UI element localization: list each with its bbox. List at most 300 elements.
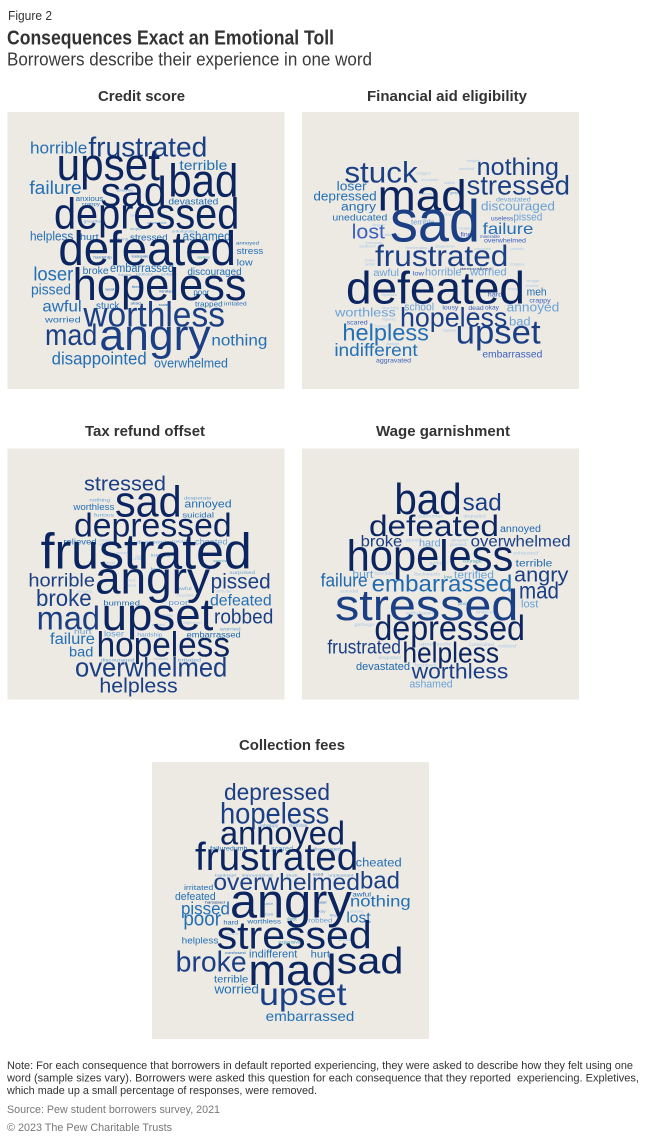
- word cloud: credit score: insufficient: [136, 272, 153, 276]
- word cloud: wage garnishment: subhuman: [418, 513, 444, 518]
- word cloud: credit score: angry: [99, 312, 211, 360]
- word cloud: collection fees: lost: [346, 911, 371, 927]
- word cloud: tax refund offset: panicked: [116, 551, 128, 555]
- panel heading: tax refund offset: Tax refund offset: [85, 424, 205, 440]
- word cloud: wage garnishment: lost: [521, 599, 538, 611]
- word cloud: credit score: poor: [193, 287, 210, 297]
- word cloud: financial aid eligibility: shocked: [526, 284, 538, 288]
- word cloud: wage garnishment: low: [444, 574, 453, 579]
- word cloud: collection fees: scared: [271, 844, 293, 853]
- word cloud: financial aid eligibility: scared: [347, 320, 368, 326]
- word cloud: credit score: inadequate: [132, 253, 149, 258]
- word cloud: tax refund offset: lost: [151, 567, 162, 572]
- word cloud: credit score: loser: [33, 265, 74, 286]
- word cloud: financial aid eligibility: crappy: [529, 299, 551, 305]
- note text: which made up a small percentage of responses, were removed.: [6, 1085, 317, 1097]
- word cloud: tax refund offset: sucked: [151, 553, 171, 558]
- word cloud: tax refund offset: confused: [99, 539, 111, 543]
- word cloud: tax refund offset: sorrow: [213, 559, 229, 563]
- word cloud: collection fees: horrible: [289, 823, 308, 828]
- word cloud: credit score: irritated: [224, 302, 247, 308]
- word cloud: credit score: stress: [237, 246, 264, 256]
- word cloud: financial aid eligibility: dead: [468, 306, 484, 312]
- word cloud: financial aid eligibility: awful: [373, 268, 399, 279]
- word cloud: wage garnishment: terrible: [516, 559, 553, 570]
- word cloud: tax refund offset: unfair: [133, 557, 144, 561]
- word cloud: credit score: ashamed: [183, 230, 231, 244]
- word cloud: financial aid eligibility: uneducated: [332, 213, 387, 223]
- word cloud: wage garnishment: mad: [519, 577, 559, 603]
- word cloud: credit score: pissed: [31, 283, 71, 299]
- word cloud: tax refund offset: robbed: [214, 606, 273, 628]
- word cloud: financial aid eligibility: worried: [469, 267, 507, 279]
- word cloud: financial aid eligibility: bummed: [375, 324, 388, 328]
- word cloud: tax refund offset: furious: [94, 513, 114, 518]
- word cloud: credit score: unfair: [161, 272, 175, 276]
- word cloud: credit score: frustrated: [88, 132, 207, 163]
- word cloud: financial aid eligibility: mad: [378, 173, 467, 221]
- word cloud: financial aid eligibility: sad: [390, 188, 480, 255]
- word cloud: collection fees: bankrupt: [215, 873, 237, 878]
- word cloud: tax refund offset: pained: [126, 584, 136, 588]
- word cloud: tax refund offset: frightened: [183, 621, 202, 625]
- panel background: wage garnishment: [302, 448, 579, 700]
- word cloud: collection fees: bad: [360, 867, 400, 894]
- word cloud: wage garnishment: devastated: [356, 661, 410, 673]
- word cloud: tax refund offset: scared: [135, 554, 145, 558]
- word cloud: tax refund offset: depressed: [74, 508, 232, 545]
- subtitle: Borrowers describe their experience in one word: [7, 50, 372, 70]
- word cloud: collection fees: debt: [287, 917, 298, 922]
- word cloud: tax refund offset: tired: [125, 579, 135, 583]
- word cloud: financial aid eligibility: frightening: [382, 318, 396, 322]
- word cloud: wage garnishment: terrified: [454, 569, 494, 581]
- word cloud: credit score: discouraged: [187, 267, 242, 278]
- word cloud: financial aid eligibility: defeated: [346, 262, 525, 313]
- word cloud: tax refund offset: unhappy: [99, 542, 111, 546]
- word cloud: financial aid eligibility: hard: [488, 293, 502, 299]
- word cloud: wage garnishment: broke: [361, 534, 402, 551]
- word cloud: financial aid eligibility: insufficient: [359, 245, 376, 249]
- panel heading: collection fees: Collection fees: [239, 738, 345, 754]
- word cloud: financial aid eligibility: horrible: [425, 267, 462, 279]
- word cloud: tax refund offset: horrible: [28, 570, 95, 591]
- word cloud: collection fees: okay: [316, 908, 326, 913]
- figure label: Figure 2: [8, 8, 52, 23]
- word cloud: wage garnishment: depressed: [374, 609, 525, 648]
- word cloud: tax refund offset: mad: [37, 600, 100, 637]
- word cloud: collection fees: irritated: [184, 883, 213, 892]
- word cloud: tax refund offset: discouraged: [101, 658, 135, 663]
- word cloud: wage garnishment: degraded: [463, 513, 486, 518]
- word cloud: credit score: trapped: [195, 300, 223, 309]
- word cloud: financial aid eligibility: demoralized: [460, 266, 492, 271]
- word cloud: financial aid eligibility: drying: [508, 287, 518, 291]
- word cloud: financial aid eligibility: lousy: [442, 305, 458, 311]
- word cloud: tax refund offset: failure: [50, 631, 95, 648]
- word cloud: credit score: furious: [118, 273, 132, 277]
- word cloud: financial aid eligibility: inadequate: [366, 241, 382, 245]
- word cloud: tax refund offset: hurt: [74, 627, 92, 636]
- word cloud: collection fees: broke: [176, 947, 247, 979]
- word cloud: financial aid eligibility: upset: [456, 314, 541, 351]
- word cloud: collection fees: terrible: [214, 974, 249, 985]
- word cloud: financial aid eligibility: okay: [485, 305, 499, 311]
- word cloud: financial aid eligibility: fine: [460, 233, 472, 239]
- word cloud: collection fees: stressed: [217, 913, 372, 957]
- word cloud: wage garnishment: stressed: [335, 582, 518, 630]
- word cloud: credit score: useless: [197, 255, 210, 260]
- word cloud: collection fees: sad: [337, 940, 403, 981]
- word cloud: wage garnishment: horrible: [374, 571, 394, 576]
- word cloud: collection fees: used: [313, 872, 323, 877]
- word cloud: wage garnishment: hurt: [352, 569, 374, 581]
- word cloud: tax refund offset: bummed: [103, 599, 140, 608]
- word cloud: credit score: sad: [101, 168, 167, 215]
- word cloud: financial aid eligibility: struggle: [527, 279, 539, 283]
- word cloud: credit score: stuck: [96, 301, 119, 312]
- word cloud: financial aid eligibility: stuck: [344, 157, 419, 190]
- word cloud: credit score: defeated: [58, 222, 236, 276]
- word cloud: credit score: unfortunate: [172, 230, 195, 234]
- note text: word (sample sizes vary). Borrowers were asked this question for each consequence that they reported experiencing. Expletives,: [6, 1072, 639, 1084]
- word cloud: collection fees: expensive: [278, 940, 301, 945]
- word cloud: financial aid eligibility: devastated: [496, 197, 531, 204]
- word cloud: collection fees: mad: [248, 947, 337, 995]
- word cloud: wage garnishment: awful: [429, 560, 443, 565]
- word cloud: wage garnishment: poor: [458, 601, 469, 606]
- word cloud: tax refund offset: bad: [69, 644, 93, 660]
- word cloud: financial aid eligibility: aggravated: [376, 358, 411, 365]
- word cloud: wage garnishment: hard: [419, 538, 441, 550]
- word cloud: tax refund offset: betrayed: [153, 657, 169, 661]
- word cloud: credit score: dumb: [117, 238, 128, 242]
- word cloud: credit score: depressed: [54, 190, 239, 238]
- word cloud: financial aid eligibility: low: [413, 272, 425, 278]
- word cloud: tax refund offset: worried: [220, 627, 241, 632]
- word cloud: tax refund offset: defeated: [210, 593, 272, 610]
- word cloud: financial aid eligibility: useless: [491, 216, 514, 223]
- word cloud: collection fees: poor: [183, 909, 221, 931]
- word cloud: financial aid eligibility: unacceptable: [474, 247, 491, 251]
- word cloud: tax refund offset: inadequate: [155, 614, 173, 618]
- word cloud: collection fees: discouraged: [313, 847, 341, 852]
- word cloud: credit score: devastated: [168, 197, 218, 207]
- word cloud: tax refund offset: hardship: [137, 633, 162, 639]
- word cloud: financial aid eligibility: pissed: [513, 212, 542, 224]
- word cloud: collection fees: embarrassed: [266, 1008, 354, 1024]
- word cloud: wage garnishment: disgusted: [378, 655, 402, 660]
- title: Consequences Exact an Emotional Toll: [7, 28, 334, 50]
- word cloud: financial aid eligibility: terrified: [365, 263, 375, 267]
- word cloud: financial aid eligibility: heartbreaking: [406, 246, 427, 250]
- panel heading: credit score: Credit score: [98, 89, 185, 105]
- word cloud: credit score: embarrassed: [110, 261, 174, 275]
- word cloud: collection fees: irate: [262, 901, 274, 906]
- word cloud: credit score: worthless: [82, 296, 225, 335]
- word cloud: financial aid eligibility: bad: [509, 315, 531, 329]
- word cloud: collection fees: hurt: [311, 950, 330, 961]
- word cloud: financial aid eligibility: embarrassed: [482, 350, 542, 361]
- word cloud: wage garnishment: defeated: [369, 510, 499, 543]
- word cloud: credit score: broke: [83, 266, 109, 277]
- word cloud: financial aid eligibility: cheated: [458, 226, 470, 230]
- word cloud: wage garnishment: angry: [514, 564, 569, 587]
- word cloud: financial aid eligibility: indigent: [417, 172, 431, 176]
- word cloud: credit score: hopeless: [73, 259, 247, 310]
- word cloud: collection fees: pissed: [181, 898, 230, 918]
- word cloud: credit score: weak: [105, 287, 115, 292]
- word cloud: credit score: unworthy: [117, 187, 133, 192]
- word cloud: financial aid eligibility: hopeless: [400, 303, 507, 333]
- word cloud: collection fees: loser: [318, 899, 328, 904]
- word cloud: wage garnishment: backwards: [414, 572, 440, 577]
- word cloud: financial aid eligibility: stressed: [467, 170, 570, 200]
- word cloud: credit score: greatful: [83, 219, 102, 224]
- word cloud: tax refund offset: frustrated: [41, 523, 252, 579]
- word cloud: wage garnishment: overwhelmed: [471, 534, 571, 551]
- copyright: © 2023 The Pew Charitable Trusts: [7, 1122, 172, 1134]
- word cloud: wage garnishment: suicidal: [340, 588, 358, 593]
- word cloud: credit score: worried: [44, 315, 81, 325]
- word cloud: collection fees: frustrated: [195, 835, 358, 879]
- word cloud: credit score: terrible: [179, 157, 228, 173]
- word cloud: wage garnishment: ashamed: [409, 679, 453, 691]
- word cloud: collection fees: harassed: [205, 899, 225, 904]
- word cloud: tax refund offset: annoyed: [184, 498, 232, 510]
- word cloud: collection fees: robbed: [308, 919, 332, 925]
- word cloud: financial aid eligibility: broken: [365, 259, 375, 263]
- word cloud: financial aid eligibility: trapped: [443, 328, 456, 332]
- word cloud: tax refund offset: worthless: [72, 502, 115, 512]
- note text: [6, 1060, 639, 1097]
- word cloud: credit score: unbelievable: [147, 221, 167, 225]
- word cloud: financial aid eligibility: overwhelmed: [484, 238, 526, 245]
- word cloud: collection fees: upset: [259, 976, 347, 1012]
- word cloud: credit score: [29, 132, 267, 371]
- word cloud: wage garnishment: failure: [321, 570, 368, 591]
- word cloud: tax refund offset: disgusted: [177, 594, 194, 598]
- panel heading: financial aid eligibility: Financial aid eligibility: [367, 89, 527, 105]
- word cloud: credit score: mad: [45, 319, 97, 352]
- word cloud: wage garnishment: frustrated: [327, 637, 401, 658]
- word cloud: credit score: awful: [42, 299, 82, 316]
- word cloud: wage garnishment: pissed: [450, 542, 467, 547]
- word cloud: tax refund offset: unfortunate: [216, 590, 231, 594]
- word cloud: financial aid eligibility: lost: [352, 220, 385, 243]
- word cloud: tax refund offset: stressed: [84, 473, 166, 496]
- word cloud: tax refund offset: disappointed: [137, 539, 174, 544]
- word cloud: tax refund offset: irritated: [178, 658, 202, 663]
- word cloud: tax refund offset: cheated: [195, 537, 228, 547]
- word cloud: financial aid eligibility: pathetic: [510, 247, 525, 251]
- word cloud: financial aid eligibility: disgrace: [372, 223, 385, 227]
- panel background: tax refund offset: [8, 448, 284, 700]
- word cloud: tax refund offset: surprised: [229, 570, 256, 575]
- word cloud: wage garnishment: exhausted: [513, 550, 539, 555]
- word cloud: tax refund offset: embarrassed: [187, 630, 241, 639]
- word cloud: collection fees: unpleasant: [328, 873, 354, 878]
- note text: Note: For each consequence that borrowers in default reported experiencing, they were asked to describe how they felt using one: [7, 1060, 633, 1072]
- word cloud: collection fees: [175, 779, 411, 1024]
- word cloud: financial aid eligibility: stalled: [444, 181, 455, 185]
- word cloud: collection fees: dumb: [230, 846, 248, 853]
- word cloud: collection fees: unhappy: [258, 823, 279, 828]
- word cloud: credit score: bad: [168, 155, 238, 207]
- word cloud: tax refund offset: helpless: [99, 676, 178, 698]
- panel heading: wage garnishment: Wage garnishment: [376, 424, 510, 440]
- word cloud: credit score: sick: [130, 214, 140, 218]
- word cloud: financial aid eligibility: tarnished: [459, 167, 474, 171]
- word cloud: financial aid eligibility: annoyed: [507, 300, 559, 315]
- word cloud: financial aid eligibility: important: [382, 293, 397, 297]
- word cloud: tax refund offset: stupid: [103, 561, 115, 565]
- word cloud: credit score: low: [237, 258, 253, 268]
- word cloud: financial aid eligibility: discouraged: [481, 200, 555, 214]
- word cloud: tax refund offset: okay: [174, 539, 187, 544]
- word cloud: tax refund offset: annoying: [77, 590, 92, 594]
- word cloud: tax refund offset: hopeless: [97, 626, 230, 665]
- word cloud: wage garnishment: hopeless: [347, 533, 513, 581]
- word cloud: financial aid eligibility: failure: [483, 221, 533, 238]
- word cloud: credit score: stressed: [130, 233, 168, 243]
- word cloud: wage garnishment: worthless: [411, 658, 509, 683]
- word cloud: wage garnishment: annoyed: [500, 524, 541, 535]
- word cloud: wage garnishment: anxious: [476, 609, 494, 614]
- word cloud: credit score: horrible: [30, 138, 87, 157]
- word cloud: financial aid eligibility: disappointed: [435, 245, 455, 249]
- word cloud: financial aid eligibility: meh: [527, 287, 547, 299]
- word cloud: tax refund offset: poor: [168, 598, 189, 607]
- word cloud: credit score: afraid: [131, 301, 141, 306]
- word cloud: collection fees: awful: [352, 892, 372, 899]
- word cloud: collection fees: hard: [223, 920, 238, 926]
- word cloud: collection fees: nothing: [350, 894, 411, 911]
- word cloud: collection fees: overwhelmed: [213, 869, 360, 895]
- word cloud: wage garnishment: robbed: [498, 643, 517, 648]
- word cloud: tax refund offset: nothing: [89, 498, 111, 503]
- word cloud: credit score: crappy: [82, 201, 101, 207]
- word cloud: financial aid eligibility: okay: [444, 213, 451, 217]
- word cloud: tax refund offset: overwhelmed: [75, 653, 227, 683]
- word cloud: collection fees: stuck: [286, 873, 298, 878]
- word cloud: collection fees: failure: [210, 846, 230, 853]
- word cloud: collection fees: annoying: [350, 910, 363, 914]
- word cloud: wage garnishment: despair: [451, 537, 469, 542]
- word cloud: tax refund offset: awful: [177, 586, 192, 591]
- word cloud: credit score: scared: [159, 303, 170, 307]
- panel background: collection fees: [152, 762, 429, 1039]
- word cloud: tax refund offset: loser: [104, 630, 124, 639]
- source: Source: Pew student borrowers survey, 2021: [7, 1104, 220, 1116]
- word cloud: tax refund offset: suicidal: [182, 510, 214, 519]
- word cloud: wage garnishment: upset: [419, 641, 436, 646]
- word cloud: financial aid eligibility: nothing: [477, 154, 559, 181]
- word cloud: financial aid eligibility: loser: [337, 180, 367, 194]
- word cloud: tax refund offset: [28, 473, 273, 698]
- word cloud: credit score: stupid: [130, 227, 142, 231]
- word cloud: credit score: overwhelmed: [154, 357, 228, 371]
- word cloud: credit score: annoyed: [236, 241, 260, 246]
- word cloud: credit score: upset: [57, 139, 160, 190]
- word cloud: credit score: hardship: [93, 255, 113, 260]
- word cloud: credit score: hurt: [80, 232, 99, 242]
- word cloud: wage garnishment: controlled: [469, 642, 495, 647]
- word cloud: collection fees: defeated: [175, 891, 216, 903]
- word cloud: financial aid eligibility: terrible: [411, 217, 434, 226]
- word cloud: tax refund offset: upset: [102, 589, 214, 640]
- word cloud: tax refund offset: violated: [152, 623, 165, 627]
- word cloud: wage garnishment: sucks: [437, 641, 451, 646]
- word cloud: collection fees: unfair: [338, 938, 353, 942]
- word cloud: wage garnishment: courage: [463, 559, 482, 564]
- word cloud: financial aid eligibility: disappointing: [382, 306, 398, 310]
- word cloud: financial aid eligibility: angry: [341, 200, 377, 214]
- word cloud: financial aid eligibility: gross: [450, 191, 458, 195]
- word cloud: collection fees: hopeless: [220, 797, 329, 830]
- word cloud: collection fees: angry: [230, 874, 352, 928]
- word cloud: tax refund offset: sad: [115, 479, 182, 527]
- word cloud: tax refund offset: broke: [36, 585, 92, 611]
- word cloud: financial aid eligibility: miserable: [480, 234, 500, 239]
- word cloud: financial aid eligibility: furious: [419, 192, 433, 196]
- word cloud: wage garnishment: withdrawn: [406, 611, 434, 616]
- panel background: financial aid eligibility: [302, 112, 579, 389]
- word cloud: collection fees: mob: [263, 912, 274, 917]
- word cloud: financial aid eligibility: worthless: [334, 306, 396, 320]
- word cloud: tax refund offset: desperate: [184, 495, 212, 500]
- word cloud: collection fees: impoverished: [242, 873, 273, 878]
- word cloud: financial aid eligibility: incomplete: [422, 178, 438, 182]
- word cloud: credit score: failure: [29, 177, 82, 198]
- word cloud: tax refund offset: relieved: [63, 537, 97, 546]
- word cloud: financial aid eligibility: unhappy: [383, 233, 400, 237]
- word cloud: financial aid eligibility: frustrated: [375, 240, 508, 273]
- word cloud: collection fees: depressed: [224, 779, 330, 805]
- word cloud: wage garnishment: betrayed: [415, 663, 437, 668]
- word cloud: wage garnishment: sad: [463, 490, 502, 517]
- word cloud: financial aid eligibility: [313, 154, 570, 365]
- panel background: credit score: [8, 112, 284, 389]
- word cloud: credit score: limited: [159, 289, 174, 294]
- word cloud: tax refund offset: angry: [95, 552, 211, 603]
- word cloud: collection fees: helpless: [182, 935, 219, 945]
- word cloud: financial aid eligibility: helpless: [342, 320, 429, 346]
- word cloud: wage garnishment: helpless: [402, 637, 499, 669]
- word cloud: collection fees: worthless: [246, 919, 281, 925]
- word cloud: credit score: anxious: [76, 194, 104, 203]
- word cloud: wage garnishment: alone: [406, 537, 420, 542]
- word cloud: collection fees: cheated: [356, 856, 402, 870]
- word cloud: financial aid eligibility: distraught: [386, 342, 399, 346]
- word cloud: wage garnishment: [321, 476, 571, 691]
- word cloud: collection fees: fine: [330, 912, 337, 917]
- word cloud: credit score: disappointed: [52, 348, 147, 368]
- word cloud: credit score: tired: [132, 284, 140, 289]
- word cloud: collection fees: shocked: [225, 932, 238, 936]
- word cloud: financial aid eligibility: irritated: [510, 263, 524, 267]
- word cloud: collection fees: annoyed: [220, 815, 345, 852]
- word cloud: financial aid eligibility: school: [404, 302, 434, 314]
- word cloud: credit score: nothing: [211, 333, 267, 350]
- word cloud: wage garnishment: bad: [394, 476, 462, 524]
- word cloud: wage garnishment: embarrassed: [372, 571, 512, 597]
- word cloud: financial aid eligibility: depressed: [313, 190, 377, 204]
- word cloud: collection fees: indifferent: [249, 949, 297, 961]
- word cloud: wage garnishment: garbage: [354, 622, 375, 627]
- word cloud: financial aid eligibility: indifferent: [334, 340, 418, 360]
- word cloud: financial aid eligibility: vengeful: [467, 159, 480, 163]
